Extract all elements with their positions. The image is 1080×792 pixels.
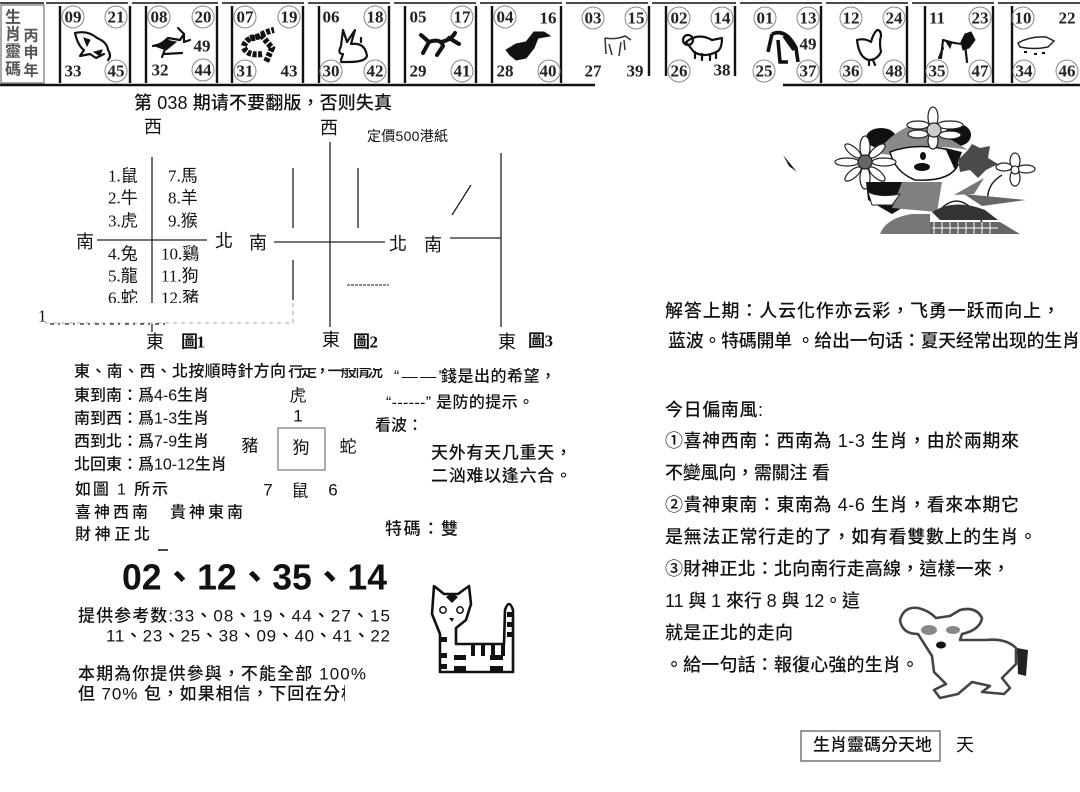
cell: sheep 02 14 26 38: 26 (670, 62, 688, 80)
hint notes: 看波： (375, 416, 423, 434)
cell: horse 03 15 27 39: 15 (628, 8, 644, 28)
cell: rabbit 06 18 30 42: 18 (366, 8, 384, 26)
cell: pig 10 22 34 46 (1012, 6, 1078, 83)
diagram 1: zodiac compass: 圖1 (181, 332, 205, 352)
zodiac cross with dog box: 蛇 (340, 438, 356, 456)
cell: rooster 12 24 36 48: 36 (842, 62, 860, 80)
hint notes: “------” 是防的提示。 (386, 394, 534, 412)
cell: sheep 02 14 26 38: 14 (714, 8, 731, 28)
cell: rooster 12 24 36 48: 48 (886, 62, 902, 80)
diagram 3: compass lines: 圖3 (528, 332, 553, 350)
direction rules text: 西到北：爲7-9生肖 (74, 432, 209, 450)
cell: dragon 05 17 29 41: 41 (454, 62, 470, 80)
cell: rat 09 21 33 45: 09 (64, 8, 82, 26)
diagram 2: compass lines: 西 (320, 118, 338, 138)
cell: sheep 02 14 26 38: 38 (714, 60, 730, 80)
answer for last issue (665, 301, 1080, 351)
direction rules text: 財神正北 (75, 526, 150, 544)
cell: rabbit 06 18 30 42 (319, 6, 389, 83)
today's wind analysis: ①喜神西南：西南為 1-3 生肖，由於兩期來 (665, 431, 1019, 451)
cell: dragon 05 17 29 41: 29 (410, 62, 426, 80)
cell: monkey 01 13 25 37 49: 37 (800, 62, 817, 80)
icon: cartoon mouse (900, 608, 1028, 698)
cell: rat 09 21 33 45: 45 (108, 62, 124, 80)
white flower (996, 153, 1035, 186)
strip title box: 肖 (5, 26, 21, 44)
direction rules text: 南到西：爲1-3生肖 (74, 410, 209, 428)
price note: 定價500港紙 (367, 128, 448, 144)
strip title box (1, 5, 44, 83)
top zodiac number strip (0, 3, 1080, 85)
diagram 1: zodiac compass: 1 (38, 306, 46, 326)
cell: ox 08 20 32 44 49: 44 (194, 60, 212, 80)
cell: pig 10 22 34 46: 46 (1058, 62, 1076, 80)
strip title box: 年 (23, 62, 39, 80)
diagram 1: zodiac compass: 東 (146, 332, 164, 352)
diagram 1: zodiac compass (38, 117, 293, 352)
zodiac list: 12.豬 (161, 288, 199, 308)
cell: horse 03 15 27 39: 03 (584, 8, 602, 28)
zodiac list: 3.虎 (108, 212, 138, 230)
cell: rooster 12 24 36 48: 24 (886, 8, 903, 28)
poem: 二汹难以逢六合。 (431, 466, 572, 486)
cell: rooster 12 24 36 48 (840, 6, 907, 83)
direction rules text: 東、南、西、北按順時針方向 (74, 362, 286, 380)
cell: monkey 01 13 25 37 49 (753, 6, 821, 83)
today's wind analysis: 。給一句話：報復心強的生肖。 (665, 655, 919, 675)
diagram 3: compass lines: 東 (498, 332, 516, 352)
zodiac list: 1.鼠 (108, 166, 138, 186)
direction rules text (74, 362, 383, 550)
direction rules text: 東到南：爲4-6生肖 (74, 386, 209, 404)
strip title box: 丙 (23, 28, 39, 44)
zodiac cross with dog box: 虎 (290, 386, 306, 406)
zodiac list: 8.羊 (168, 188, 198, 208)
cell: snake 04 16 28 40: 16 (540, 8, 556, 28)
icon: cartoon tiger (432, 586, 513, 672)
zodiac cross with dog box: 鼠 (292, 482, 308, 500)
today's wind analysis: ②貴神東南：東南為 4-6 生肖，看來本期它 (665, 495, 1019, 515)
cell: snake 04 16 28 40: 40 (540, 62, 556, 80)
diagram 2: compass lines (249, 118, 407, 352)
cell: dragon 05 17 29 41: 05 (410, 8, 426, 26)
cell: dragon 05 17 29 41: 17 (454, 8, 471, 26)
hint notes: “——” (394, 368, 444, 386)
diagram 2: compass lines: 北 (389, 234, 407, 254)
answer for last issue: 解答上期：人云化作亦云彩，飞勇一跃而向上， (665, 301, 1060, 321)
zodiac cross with dog box: 1 (293, 406, 303, 426)
strip title box: 申 (23, 44, 39, 62)
cell: dog 11 23 35 47: 23 (972, 8, 988, 28)
cell: tiger 07 19 31 43: 31 (236, 62, 254, 80)
illustration: minnie with flowers (835, 107, 1035, 234)
hint notes (286, 352, 561, 434)
cell: pig 10 22 34 46: 22 (1058, 8, 1076, 28)
cell: rat 09 21 33 45: 33 (64, 62, 82, 80)
dark flower (958, 144, 998, 178)
disclaimer (78, 664, 366, 704)
cell: snake 04 16 28 40: 04 (496, 8, 514, 26)
disclaimer: 但 70% 包，如果相信，下回在分析 (78, 684, 358, 704)
strip title box: 生 (5, 8, 21, 26)
cell: ox 08 20 32 44 49: 32 (152, 60, 168, 80)
diagram 3: compass lines: 南 (424, 235, 442, 255)
diagram 1: zodiac compass: 北 (215, 231, 233, 251)
cell: snake 04 16 28 40 (492, 6, 561, 83)
cell: rabbit 06 18 30 42: 42 (366, 62, 384, 80)
poem: 天外有天几重天， (431, 444, 572, 462)
cell: dog 11 23 35 47: 47 (972, 62, 989, 80)
cell: rat 09 21 33 45: 21 (108, 8, 124, 26)
strip title box: 靈 (5, 42, 21, 60)
cell: pig 10 22 34 46: 10 (1014, 8, 1032, 28)
icon: brush mark (783, 155, 797, 172)
cell: dog 11 23 35 47 (925, 6, 993, 83)
left flower (835, 136, 896, 189)
today's wind analysis: 11 與 1 來行 8 與 12。這 (665, 591, 860, 611)
diagram 2: compass lines: 南 (249, 233, 267, 253)
diagram 1: zodiac compass: 南 (76, 232, 94, 252)
zodiac cross with dog box: 6 (328, 480, 338, 500)
reference numbers: 提供参考数:33、08、19、44、27、15 (78, 606, 390, 626)
cell: ox 08 20 32 44 49: 20 (194, 8, 212, 26)
direction rules text: 如圖 1 所示 (75, 480, 168, 498)
direction rules text: 北回東：爲10-12生肖 (74, 456, 227, 474)
zodiac list: 10.鷄 (161, 244, 199, 264)
zodiac cross with dog box: 豬 (242, 436, 258, 456)
cell: tiger 07 19 31 43 (232, 6, 303, 83)
reference numbers: 11、23、25、38、09、40、41、22 (106, 626, 390, 646)
zodiac list: 4.兔 (108, 244, 138, 264)
main numbers: 02、12、35、14 (122, 556, 387, 598)
answer for last issue: 蓝波。特碼開单 。给出一句话：夏天经常出现的生肖 (668, 331, 1080, 351)
direction rules text: 行走，一般情況 (288, 362, 383, 380)
hat flower (907, 107, 963, 149)
cell: dog 11 23 35 47: 11 (929, 8, 945, 28)
zodiac cross with dog box (242, 386, 356, 500)
zodiac cross with dog box: 狗 (292, 438, 310, 458)
today's wind analysis (665, 400, 1037, 675)
cell: rabbit 06 18 30 42: 06 (322, 8, 340, 26)
zodiac list: 11.狗 (161, 266, 199, 286)
cell: tiger 07 19 31 43: 43 (280, 62, 298, 80)
today's wind analysis: ③財神正北：北向南行走高線，這樣一來， (665, 559, 1010, 579)
reference numbers (78, 606, 390, 646)
cell: monkey 01 13 25 37 49: 01 (756, 8, 774, 28)
direction rules text: 喜神西南 貴神東南 (75, 504, 243, 522)
special code note: 特碼：雙 (385, 520, 458, 538)
disclaimer: 本期為你提供參與，不能全部 100% (78, 664, 366, 684)
diagram 2: compass lines: 東 (322, 330, 340, 350)
today's wind analysis: 是無法正常行走的了，如有看雙數上的生肖。 (665, 527, 1037, 547)
issue heading: 第 038 期请不要翻版，否则失真 (134, 93, 392, 113)
cell: monkey 01 13 25 37 49: 13 (800, 8, 816, 28)
hint notes: 錢是出的希望， (441, 368, 556, 386)
zodiac list: 6.蛇 (108, 288, 138, 308)
zodiac cross with dog box: 7 (263, 480, 273, 500)
cell: tiger 07 19 31 43: 07 (236, 8, 254, 26)
cell: ox 08 20 32 44 49: 08 (150, 8, 168, 26)
zodiac list: 2.牛 (108, 188, 138, 208)
cell: dog 11 23 35 47: 35 (928, 62, 946, 80)
cell: snake 04 16 28 40: 28 (496, 62, 514, 80)
zodiac list: 7.馬 (168, 166, 198, 186)
cell: horse 03 15 27 39: 27 (584, 62, 602, 80)
cell: ox 08 20 32 44 49: 49 (194, 36, 210, 56)
zodiac list: 9.猴 (168, 212, 198, 230)
cell: monkey 01 13 25 37 49: 49 (800, 34, 816, 54)
diagram 1: zodiac compass: 西 (144, 117, 162, 137)
cell: dragon 05 17 29 41 (405, 6, 476, 83)
diagram 2: compass lines: 圖2 (353, 332, 378, 352)
today's wind analysis: 就是正北的走向 (665, 623, 793, 643)
cell: sheep 02 14 26 38 (666, 6, 735, 82)
poem (431, 444, 572, 486)
diagram 3: compass lines (424, 153, 553, 352)
cell: horse 03 15 27 39 (582, 6, 649, 80)
today's wind analysis: 不變風向，需關注 看 (665, 463, 830, 483)
cell: tiger 07 19 31 43: 19 (280, 8, 298, 26)
footer label box: 生肖靈碼分天地 (813, 736, 932, 754)
cell: monkey 01 13 25 37 49: 25 (756, 62, 772, 80)
cell: rooster 12 24 36 48: 12 (842, 8, 860, 28)
cell: ox 08 20 32 44 49 (146, 6, 217, 83)
strip title box: 碼 (5, 62, 21, 78)
cell: rabbit 06 18 30 42: 30 (322, 62, 340, 80)
zodiac list: 5.龍 (108, 266, 138, 286)
cell: pig 10 22 34 46: 34 (1016, 62, 1033, 80)
footer label box (801, 731, 940, 761)
cell: rat 09 21 33 45 (60, 6, 130, 83)
footer character: 天 (956, 735, 974, 755)
today's wind analysis: 今日偏南風: (665, 400, 763, 420)
cell: horse 03 15 27 39: 39 (626, 62, 644, 80)
zodiac list (100, 166, 210, 317)
cell: sheep 02 14 26 38: 02 (670, 8, 688, 28)
